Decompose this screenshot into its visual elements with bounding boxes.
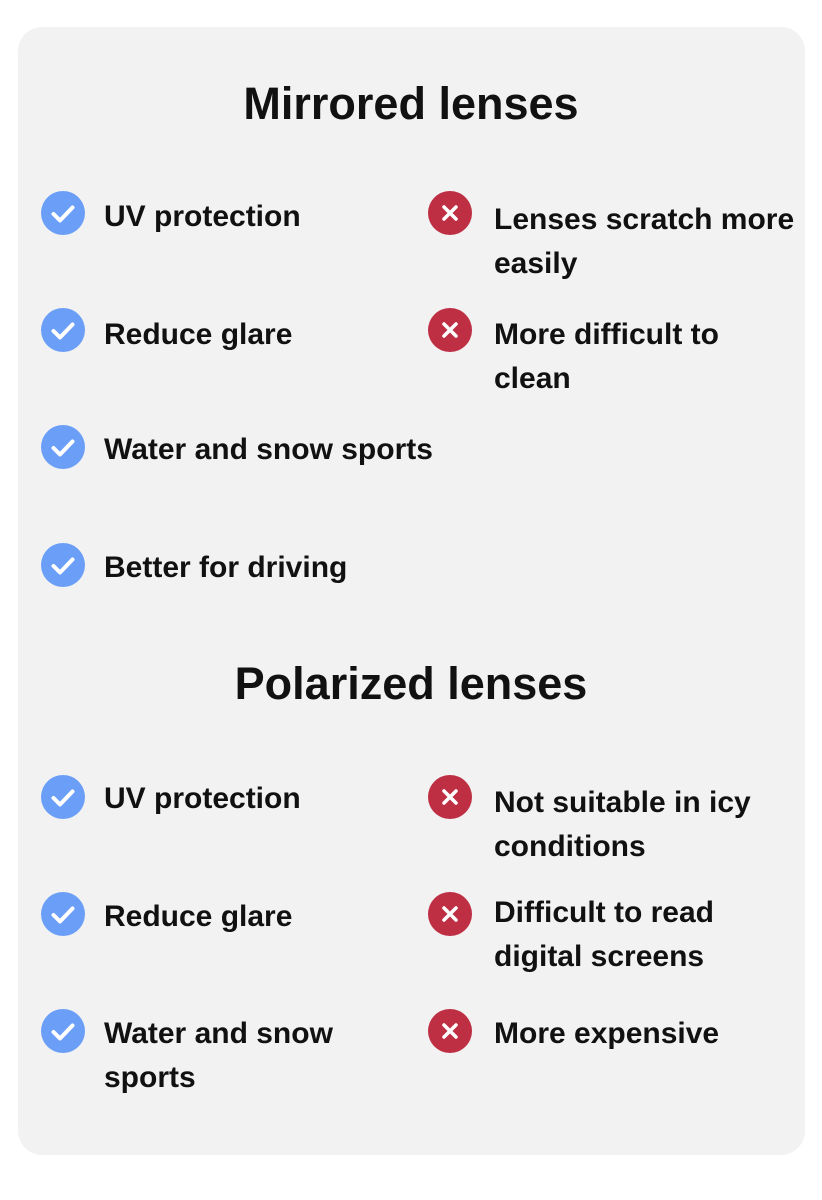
title: Polarized lenses: Polarized lenses bbox=[235, 658, 587, 709]
text: Not suitable in icy conditions: Not suitable in icy bbox=[494, 786, 751, 819]
icon: check bbox=[41, 1009, 85, 1053]
text: Water and snow sports: Water and snow bbox=[104, 1017, 333, 1050]
text: Lenses scratch more easily: easily bbox=[494, 247, 577, 280]
icon: check bbox=[41, 892, 85, 936]
text: Water and snow sports: Water and snow sports bbox=[104, 433, 433, 466]
text: Better for driving: Better for driving bbox=[104, 551, 347, 584]
icon: cross bbox=[428, 1009, 472, 1053]
icon: cross bbox=[428, 892, 472, 936]
text: Difficult to read digital screens: Difficult to read bbox=[494, 896, 714, 929]
icon: check bbox=[41, 191, 85, 235]
text: Reduce glare: Reduce glare bbox=[104, 318, 292, 351]
title: Mirrored lenses: Mirrored lenses bbox=[243, 78, 579, 129]
text: UV protection: UV protection bbox=[104, 200, 301, 233]
text: Water and snow sports bbox=[104, 1017, 333, 1094]
icon: check bbox=[41, 308, 85, 352]
text: Difficult to read digital screens bbox=[494, 896, 714, 973]
text: Lenses scratch more easily: Lenses scratch more bbox=[494, 203, 794, 236]
text: Reduce glare: Reduce glare bbox=[104, 900, 292, 933]
text: More expensive: More expensive bbox=[494, 1017, 719, 1050]
icon: check bbox=[41, 775, 85, 819]
text: UV protection: UV protection bbox=[104, 782, 301, 815]
text: More difficult to clean: More difficult to bbox=[494, 318, 719, 351]
text: More difficult to clean bbox=[494, 318, 719, 395]
icon: cross bbox=[428, 775, 472, 819]
text: More difficult to clean: clean bbox=[494, 362, 571, 395]
icon: cross bbox=[428, 191, 472, 235]
text: Not suitable in icy conditions bbox=[494, 786, 751, 863]
icon: check bbox=[41, 543, 85, 587]
text: Not suitable in icy conditions: conditions bbox=[494, 830, 646, 863]
text: Water and snow sports: sports bbox=[104, 1061, 196, 1094]
icon: check bbox=[41, 425, 85, 469]
text: Lenses scratch more easily bbox=[494, 203, 794, 280]
icon: cross bbox=[428, 308, 472, 352]
text: Difficult to read digital screens: digital screens bbox=[494, 940, 704, 973]
